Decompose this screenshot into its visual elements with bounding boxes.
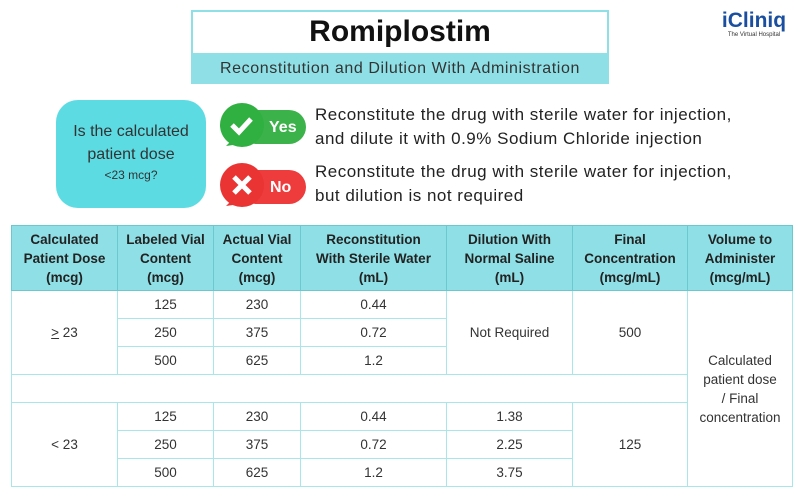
logo: The Virtual Hospital [728,32,780,38]
dosing table: With Sterile Water [316,250,431,266]
dosing table: (mcg/mL) [710,270,770,284]
dosing table: < 23 [51,437,78,452]
yes text: Reconstitute the drug with sterile water for injection, [315,105,732,124]
dosing table: 0.72 [360,437,387,452]
dosing table: 3.75 [496,465,523,480]
dosing table: 1.38 [496,409,523,424]
title: Romiplostim [309,15,491,48]
no text: Reconstitute the drug with sterile water for injection, [315,162,732,181]
question box: <23 mcg? [104,168,158,182]
dosing table: 1.2 [364,353,383,368]
dosing table: Labeled Vial [126,232,205,246]
dosing table: Dilution With [468,232,551,246]
title box [191,10,609,84]
dosing table: Concentration [584,250,676,266]
dosing table: 125 [619,437,641,452]
dosing table: / Final [722,390,758,406]
icon: no badge [220,163,306,207]
no text: but dilution is not required [315,186,524,205]
dosing table: Patient Dose [24,250,105,266]
dosing table: 230 [246,409,268,424]
dosing table: 0.44 [360,297,387,312]
dosing table: (mL) [359,270,388,284]
dosing table: 500 [619,325,641,340]
yes text: and dilute it with 0.9% Sodium Chloride injection [315,129,702,148]
dosing table: Calculated [30,232,99,246]
subtitle: Reconstitution and Dilution With Administration [220,60,580,77]
dosing table: > 23 [51,325,78,340]
dosing table: 230 [246,297,268,312]
icon: no badge: No [270,179,292,196]
dosing table: 125 [154,297,177,312]
question box [56,100,206,208]
dosing table: (mcg/mL) [600,270,660,284]
dosing table: 0.72 [360,325,387,340]
icon: yes badge [220,103,306,147]
dosing table: 0.44 [360,409,387,424]
dosing table: 375 [246,437,268,452]
dosing table: Volume to [708,232,772,246]
dosing table: Reconstitution [326,232,421,246]
dosing table: Final [614,232,646,246]
dosing table: Content [232,250,282,266]
dosing table: Content [140,250,191,266]
yes text [315,105,732,148]
no text [315,162,732,205]
question box: Is the calculated [73,123,189,140]
dosing table: Administer [705,250,775,266]
dosing table: 250 [154,437,177,452]
dosing table: 1.2 [364,465,383,480]
dosing table: 2.25 [496,437,523,452]
dosing table: (mcg) [147,270,184,284]
dosing table: 125 [154,409,177,424]
logo: iCliniq [722,9,786,32]
dosing table: 500 [154,353,177,368]
dosing table: Calculated [708,352,772,368]
dosing table: 250 [154,325,177,340]
dosing table: Not Required [470,325,549,340]
dosing table: Normal Saline [464,250,555,266]
question box: patient dose [87,146,175,163]
dosing table: 625 [246,465,268,480]
dosing table: (mL) [495,270,524,284]
dosing table: (mcg) [46,270,83,284]
dosing table [11,225,793,487]
icon: yes badge: Yes [269,119,297,136]
dosing table: Actual Vial [223,232,291,246]
dosing table: concentration [699,410,781,424]
dosing table: 500 [154,465,177,480]
dosing table: 625 [246,353,268,368]
dosing table: 375 [246,325,268,340]
dosing table: (mcg) [239,270,275,284]
subtitle [193,53,607,84]
dosing table: patient dose [703,372,777,386]
